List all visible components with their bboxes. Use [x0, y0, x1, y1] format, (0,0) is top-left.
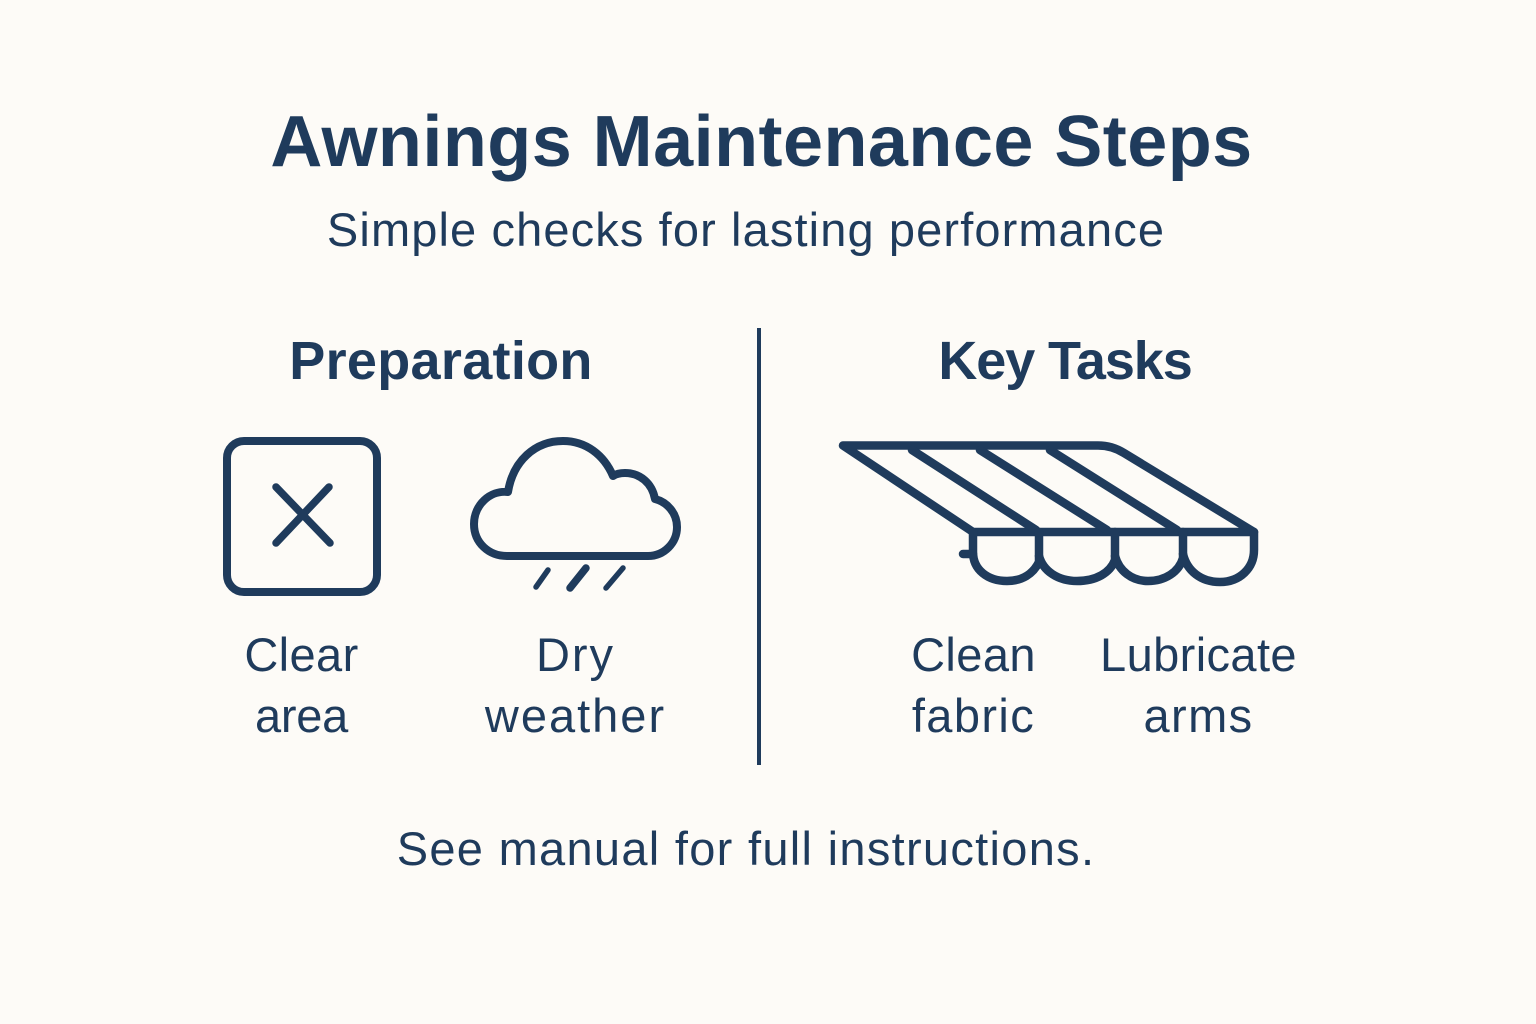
label: Dry weather [484, 628, 666, 742]
label: Clear area [244, 628, 359, 742]
heading: Key Tasks: Key Tasks [938, 331, 1192, 391]
label: Dry weather: Dry [536, 628, 615, 681]
heading: Preparation: Preparation [289, 331, 593, 391]
title: Awnings Maintenance Steps [270, 102, 1253, 182]
label: Clean fabric: fabric [912, 689, 1035, 742]
label: Clean fabric: Clean [911, 628, 1036, 681]
label: Dry weather: weather [485, 689, 666, 742]
label: Lubricate arms [1100, 628, 1297, 742]
label: Lubricate arms: Lubricate [1100, 628, 1297, 681]
label: Clean fabric [911, 628, 1036, 742]
subtitle: Simple checks for lasting performance [327, 203, 1165, 256]
label: Clear area: area [255, 689, 348, 742]
label: Clear area: Clear [244, 628, 359, 681]
divider line [757, 328, 761, 765]
label: Lubricate arms: arms [1143, 689, 1254, 742]
footer note: See manual for full instructions. [397, 822, 1095, 875]
